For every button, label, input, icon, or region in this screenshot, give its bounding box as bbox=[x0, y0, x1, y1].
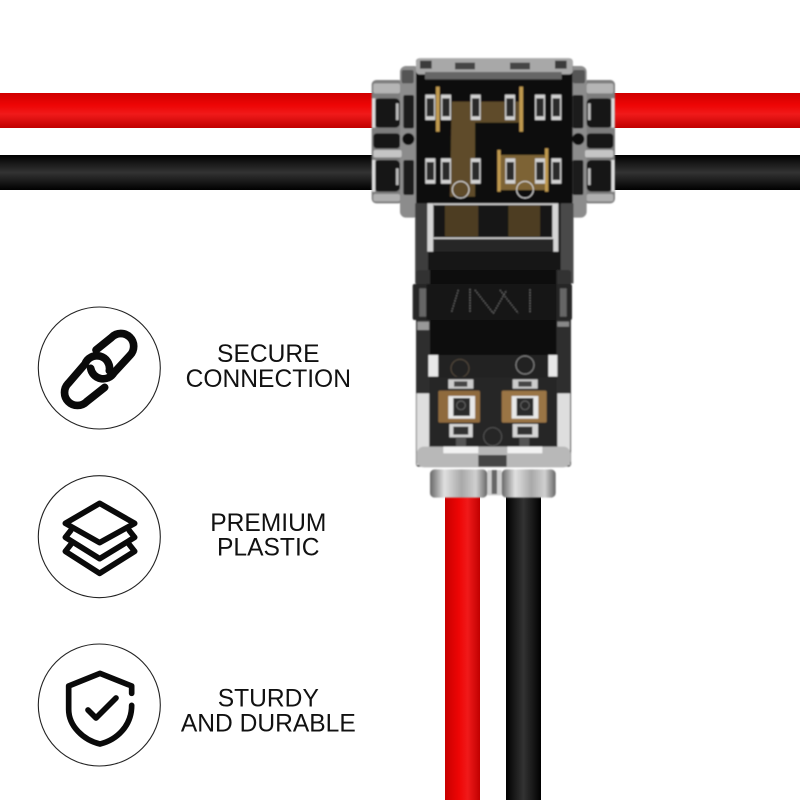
right crimp contact bbox=[502, 379, 547, 454]
feature: secure connection bbox=[38, 307, 351, 429]
label: premium plastic: PLASTIC bbox=[217, 535, 320, 562]
black wire: lower horizontal bbox=[0, 155, 800, 190]
left crimp contact bbox=[438, 379, 480, 454]
icon: shield with check bbox=[38, 644, 160, 766]
feature: sturdy and durable bbox=[38, 644, 356, 766]
red wire: top horizontal bbox=[0, 93, 800, 128]
label: secure connection: CONNECTION bbox=[186, 366, 351, 393]
label: premium plastic bbox=[210, 510, 326, 562]
wire entry collars bbox=[430, 469, 556, 498]
label: sturdy and durable: AND DURABLE bbox=[181, 711, 356, 738]
label: sturdy and durable bbox=[181, 686, 356, 738]
connector: T-tap body bbox=[372, 58, 615, 498]
feature: premium plastic bbox=[38, 476, 326, 598]
label: premium plastic: PREMIUM bbox=[210, 510, 326, 537]
label: secure connection bbox=[186, 341, 351, 393]
clamp band with embossed marking bbox=[413, 284, 572, 320]
label: sturdy and durable: STURDY bbox=[218, 686, 319, 713]
label: secure connection: SECURE bbox=[217, 341, 320, 368]
connector upper housing bbox=[372, 58, 615, 283]
icon: chain link bbox=[38, 307, 160, 429]
black wire: vertical bbox=[506, 490, 541, 800]
icon: stacked layers bbox=[38, 476, 160, 598]
connector lower housing bbox=[413, 270, 572, 498]
red wire: vertical bbox=[445, 490, 480, 800]
